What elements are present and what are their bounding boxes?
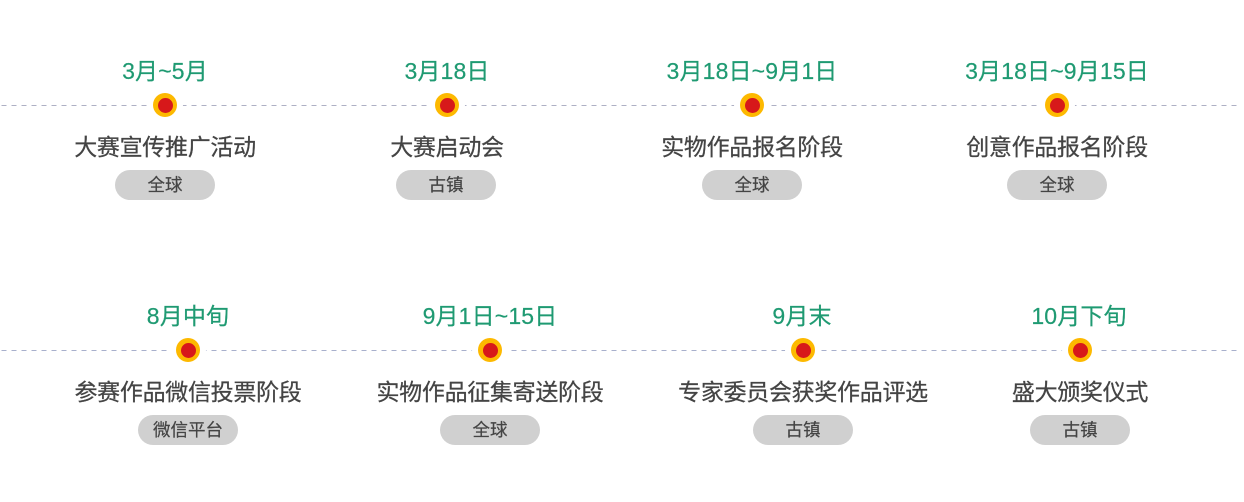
event name: 参赛作品微信投票阶段 bbox=[74, 379, 302, 405]
location pill bbox=[702, 170, 802, 200]
location pill: 古镇 bbox=[1062, 420, 1098, 440]
timeline row 2 bbox=[2, 303, 1236, 445]
marker dot bbox=[785, 332, 821, 368]
milestone: 8月中旬 bbox=[74, 303, 302, 445]
marker dot bbox=[1039, 87, 1075, 123]
location pill: 古镇 bbox=[428, 175, 464, 195]
event name: 实物作品征集寄送阶段 bbox=[376, 379, 604, 405]
milestone: 9月末 bbox=[678, 303, 928, 445]
marker dot bbox=[1062, 332, 1098, 368]
location pill: 全球 bbox=[1040, 175, 1074, 195]
location pill: 微信平台 bbox=[153, 420, 223, 440]
milestone: 3月18日~9月15日 bbox=[965, 58, 1149, 200]
milestone: 3月18日~9月1日 bbox=[661, 58, 843, 200]
location pill bbox=[753, 415, 853, 445]
date: 3月18日 bbox=[404, 58, 490, 84]
date: 3月18日~9月1日 bbox=[667, 58, 837, 84]
date: 9月末 bbox=[772, 303, 832, 329]
date: 10月下旬 bbox=[1031, 303, 1127, 329]
location pill: 全球 bbox=[734, 175, 770, 195]
milestone: 3月~5月 bbox=[74, 58, 256, 200]
milestone: 3月18日 bbox=[390, 58, 504, 200]
marker dot bbox=[147, 87, 183, 123]
marker dot bbox=[472, 332, 508, 368]
location pill: 全球 bbox=[148, 175, 182, 195]
date: 3月~5月 bbox=[122, 58, 208, 84]
milestone: 9月1日~15日 bbox=[376, 303, 604, 445]
date: 8月中旬 bbox=[147, 303, 229, 329]
event name: 大赛宣传推广活动 bbox=[74, 134, 256, 160]
event name: 专家委员会获奖作品评选 bbox=[678, 379, 928, 405]
location pill bbox=[396, 170, 496, 200]
location pill bbox=[1007, 170, 1107, 200]
marker dot bbox=[734, 87, 770, 123]
timeline row 1 bbox=[2, 58, 1236, 200]
location pill bbox=[115, 170, 215, 200]
location pill: 全球 bbox=[472, 420, 508, 440]
marker dot bbox=[170, 332, 206, 368]
event name: 实物作品报名阶段 bbox=[661, 134, 843, 160]
milestone: 10月下旬 bbox=[1012, 303, 1148, 445]
location pill: 古镇 bbox=[786, 420, 820, 440]
event name: 大赛启动会 bbox=[390, 134, 504, 160]
location pill bbox=[138, 415, 238, 445]
date: 3月18日~9月15日 bbox=[965, 58, 1149, 84]
event name: 盛大颁奖仪式 bbox=[1012, 379, 1148, 405]
marker dot bbox=[429, 87, 465, 123]
location pill bbox=[1030, 415, 1130, 445]
date: 9月1日~15日 bbox=[423, 303, 557, 329]
event name: 创意作品报名阶段 bbox=[966, 134, 1148, 160]
location pill bbox=[440, 415, 540, 445]
